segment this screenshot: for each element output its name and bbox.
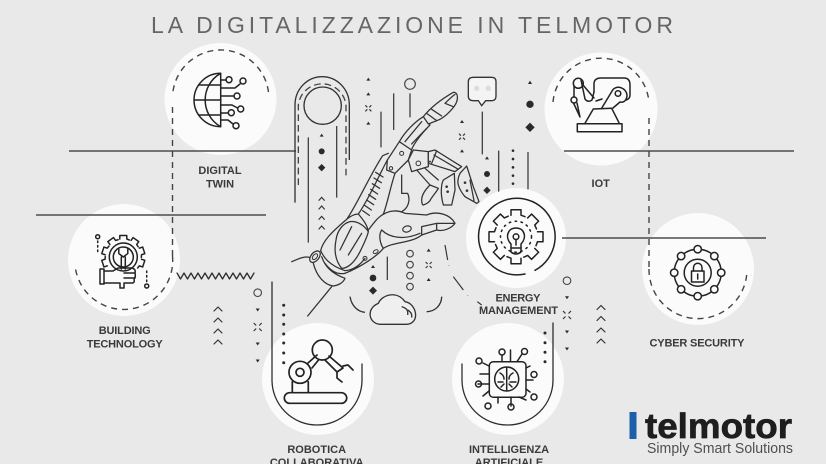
decorative column: lower right symbols xyxy=(544,277,605,363)
panel: energy management xyxy=(479,198,555,305)
curled fingers xyxy=(408,150,428,172)
label: energy management: ENERGY xyxy=(496,293,541,305)
panel: robotica collaborativa xyxy=(270,340,364,464)
symbol columns xyxy=(318,78,535,295)
label: digital twin: TWIN xyxy=(206,178,234,190)
logo blue bar xyxy=(630,412,636,439)
white circle backgrounds xyxy=(68,43,754,435)
icon: cloud xyxy=(350,295,442,324)
vertical rules xyxy=(308,93,528,280)
icon: padlock network xyxy=(670,246,725,300)
icon: robot arm xyxy=(284,340,353,403)
label: management: MANAGEMENT xyxy=(479,305,558,317)
panel: intelligenza artificiale xyxy=(469,348,549,464)
panel: building technology xyxy=(96,235,151,337)
decorative column: lower left symbols xyxy=(214,289,285,364)
robot hand xyxy=(292,92,479,316)
label: iot: IOT xyxy=(592,178,610,190)
panel: cyber security xyxy=(650,246,745,350)
icon: brain chip xyxy=(476,348,537,410)
icon: speech bubble xyxy=(468,77,496,106)
icon: gear with light bulb xyxy=(479,198,555,275)
title: LA DIGITALIZZAZIONE IN TELMOTOR xyxy=(151,12,673,38)
label: intelligenza artificiale: INTELLIGENZA xyxy=(469,444,549,456)
logo: telmotor xyxy=(630,407,793,457)
label: cyber security: CYBER SECURITY xyxy=(650,338,745,350)
icon: globe with circuit xyxy=(194,73,246,129)
dash-dot arc xyxy=(445,245,482,305)
panel: iot xyxy=(571,78,630,190)
label: robotica collaborativa: ROBOTICA xyxy=(287,444,346,456)
logo tagline: Simply Smart Solutions xyxy=(647,441,793,457)
panel: digital twin xyxy=(194,73,246,190)
central illustration: robot hand and symbols xyxy=(292,77,535,324)
connector lines xyxy=(36,50,794,425)
label: technology: TECHNOLOGY xyxy=(87,339,163,351)
logo wordmark: telmotor xyxy=(645,407,792,446)
forearm plate and palm xyxy=(321,153,388,251)
index finger xyxy=(399,117,430,150)
capsule frame xyxy=(295,77,349,203)
icon: industrial robot xyxy=(571,78,630,132)
label: building technology: BUILDING xyxy=(99,325,151,337)
label: digital twin: DIGITAL xyxy=(198,165,242,177)
icon: gear with wrench and hand xyxy=(96,235,149,288)
